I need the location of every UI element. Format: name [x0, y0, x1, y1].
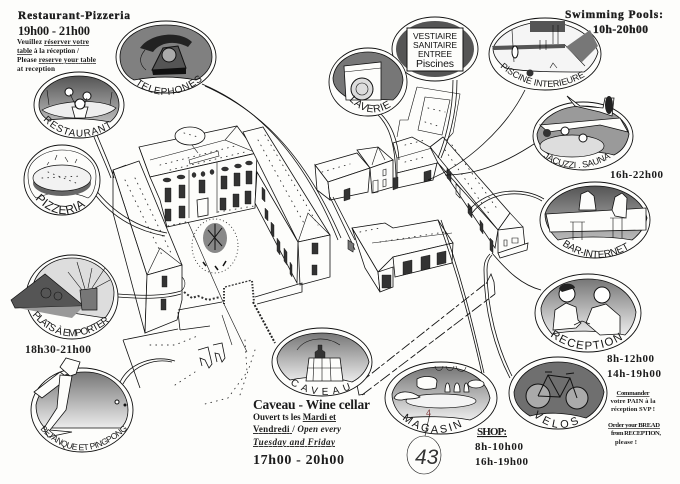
- text: take-away hours: 18h30-21h00: [25, 344, 91, 356]
- icon: jacuzzi and sunbather: [540, 96, 628, 157]
- entry lane wall: [357, 274, 495, 395]
- text: bread order note: from RECEPTION,: [611, 430, 661, 437]
- icon: boules player: [34, 358, 126, 437]
- text: caveau wine cellar: Tuesday and Friday: [253, 437, 336, 447]
- text: caveau wine cellar: Ouvert ts les Mardi et: [253, 412, 336, 422]
- label: plats a emporter: PLATS À EMPORTER: [32, 311, 109, 336]
- icon: table with flowers: [42, 88, 116, 118]
- label: laverie: LAVERIE: [350, 96, 391, 112]
- text: shop hours: SHOP:: [477, 426, 507, 438]
- bubble: jacuzzi sauna: [532, 96, 634, 170]
- bubble: velos: [508, 356, 608, 430]
- text: bread order note: Order your BREAD: [608, 422, 660, 429]
- icon: bar scene: [570, 191, 627, 240]
- bubble: plats a emporter: [10, 254, 118, 340]
- courtyard tree: [192, 219, 238, 273]
- text: restaurant hours: Veuillez réserver votre: [17, 38, 89, 46]
- label: velos: VELOS: [536, 410, 578, 428]
- text: bread order note: votre PAIN à la: [610, 398, 656, 405]
- chateau right wing: [243, 127, 330, 285]
- courtyard gate and paths: [123, 222, 302, 404]
- text: caveau wine cellar: 17h00 - 20h00: [253, 453, 344, 468]
- text: restaurant hours: at reception: [17, 65, 55, 73]
- text: reception hours: 14h-19h00: [607, 368, 662, 380]
- label: pizzeria: PIZZERIA: [36, 194, 86, 214]
- label: caveau: CAVEAU: [292, 380, 350, 395]
- text: jacuzzi hours: 16h-22h00: [610, 169, 664, 181]
- text: bread order note: réception SVP !: [611, 406, 655, 413]
- bubble: piscine interieure: [488, 18, 602, 90]
- bubble: vestiaire: [392, 17, 478, 81]
- icon: indoor pool: [492, 21, 598, 76]
- bubble: laverie: [328, 48, 408, 116]
- label: magasin: MAGASIN: [402, 414, 462, 434]
- vestiaire sign text: VESTIAIRE: [413, 31, 457, 41]
- vestiaire sign text: Piscines: [416, 58, 454, 70]
- text: restaurant hours: Restaurant-Pizzeria: [18, 10, 130, 22]
- leader lines: [94, 80, 544, 384]
- label: jacuzzi sauna: JACUZZI . SAUNA: [544, 152, 611, 168]
- outbuilding row: [315, 137, 438, 201]
- icon: pizza slice and fries: [11, 262, 110, 318]
- bubble: magasin: [384, 362, 498, 434]
- chateau main block: [139, 126, 257, 227]
- bubble: caveau: [272, 328, 372, 396]
- text: restaurant hours: Please reserve your table: [17, 56, 96, 64]
- vestiaire sign text: [413, 31, 457, 70]
- garden chairs: [198, 343, 225, 368]
- text: swimming pools hours: 10h-20h00: [593, 24, 648, 36]
- bubble: reception: [534, 274, 642, 352]
- icon: bicycle: [526, 372, 588, 409]
- lower garage building: [352, 220, 453, 292]
- facade ovals: [163, 161, 252, 182]
- text: reception hours: 8h-12h00: [607, 353, 654, 365]
- text: caveau wine cellar: [253, 397, 370, 468]
- label: bar internet: BAR-INTERNET: [562, 240, 628, 258]
- text: bread order note: please !: [615, 439, 637, 446]
- text: bread order note: Commander: [616, 390, 650, 397]
- icon: telephone: [140, 35, 192, 75]
- text: shop hours: 8h-10h00: [475, 441, 524, 453]
- text: swimming pools hours: Swimming Pools:: [565, 9, 663, 21]
- bubble: bar internet: [540, 182, 650, 258]
- right hand buildings: [315, 87, 528, 395]
- bubble: restaurant: [34, 72, 124, 138]
- text: caveau wine cellar: Vendredi / Open every: [253, 424, 342, 434]
- text: bread order note: [608, 390, 661, 446]
- pool building behind: [397, 87, 460, 145]
- text: shop hours: [475, 426, 528, 468]
- icon: pizza: [33, 155, 91, 196]
- label: reception: RECEPTION: [550, 330, 622, 350]
- bubble: betanque et pingpong: [30, 358, 134, 452]
- label: telephones: TELEPHONES: [137, 76, 202, 95]
- text: shop hours: 16h-19h00: [475, 456, 528, 468]
- text: swimming pools hours: [565, 9, 663, 36]
- handwritten number 43: 43: [415, 446, 439, 469]
- vestiaire sign text: ENTREE: [418, 49, 452, 59]
- bubble: pizzeria: [24, 144, 100, 216]
- yard wall: [330, 197, 355, 250]
- bubble: telephones: [116, 20, 216, 95]
- text: restaurant hours: 19h00 - 21h00: [18, 24, 90, 38]
- label: restaurant: RESTAURANT: [44, 116, 110, 137]
- icon: wine barrel: [297, 339, 343, 381]
- text: reception hours: [607, 353, 662, 380]
- text: caveau wine cellar: Caveau - Wine cellar: [253, 397, 370, 412]
- long south-east wing: [430, 137, 528, 258]
- text: restaurant hours: [17, 10, 130, 73]
- icon: two people shaking hands: [553, 284, 620, 335]
- facade windows: [165, 171, 252, 221]
- label: piscine interieure: PISCINE INTERIEURE: [500, 62, 585, 87]
- statue: [348, 240, 354, 252]
- chateau building: [113, 126, 330, 404]
- handwritten number 43: [407, 408, 441, 474]
- text: restaurant hours: table à la réception /: [17, 47, 80, 55]
- label: betanque et pingpong: BETANQUE ET PINGPONG: [40, 426, 127, 450]
- icon: bread and produce: [394, 366, 484, 408]
- icon: washing machine: [344, 62, 381, 100]
- vestiaire sign text: SANITAIRE: [413, 40, 457, 50]
- handwritten number 43: 4: [426, 408, 431, 418]
- chateau left wing: [113, 161, 185, 333]
